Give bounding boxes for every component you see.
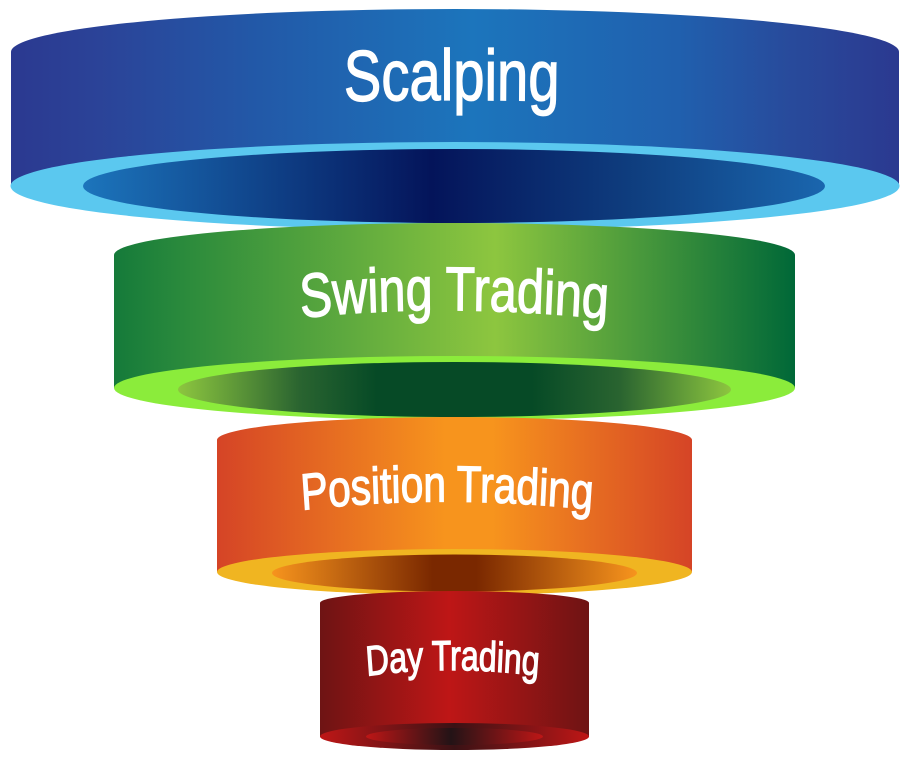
tier body: Position Trading — [217, 417, 692, 572]
label: Day Trading: Day Trading — [366, 640, 539, 684]
funnel opening: Swing Trading — [178, 362, 731, 417]
tier body: Scalping — [11, 9, 899, 186]
tier body: Swing Trading — [114, 223, 795, 388]
funnel opening: Day Trading — [366, 728, 543, 745]
tier: Day Trading — [320, 591, 589, 750]
tier: Position Trading — [217, 417, 692, 594]
ring: Day Trading rim — [320, 723, 589, 750]
tier: Swing Trading — [114, 223, 795, 419]
funnel opening: Scalping — [83, 149, 825, 223]
label: Scalping: Scalping — [346, 47, 557, 116]
tier: Scalping — [10, 9, 900, 227]
tier body: Day Trading — [320, 591, 589, 737]
ring: Swing Trading rim — [114, 356, 795, 420]
label: Position Trading: Position Trading — [302, 464, 592, 520]
ring: Scalping rim — [10, 142, 900, 230]
funnel opening: Position Trading — [272, 554, 637, 592]
label: Swing Trading: Swing Trading — [302, 266, 608, 332]
ring: Position Trading rim — [217, 549, 692, 595]
